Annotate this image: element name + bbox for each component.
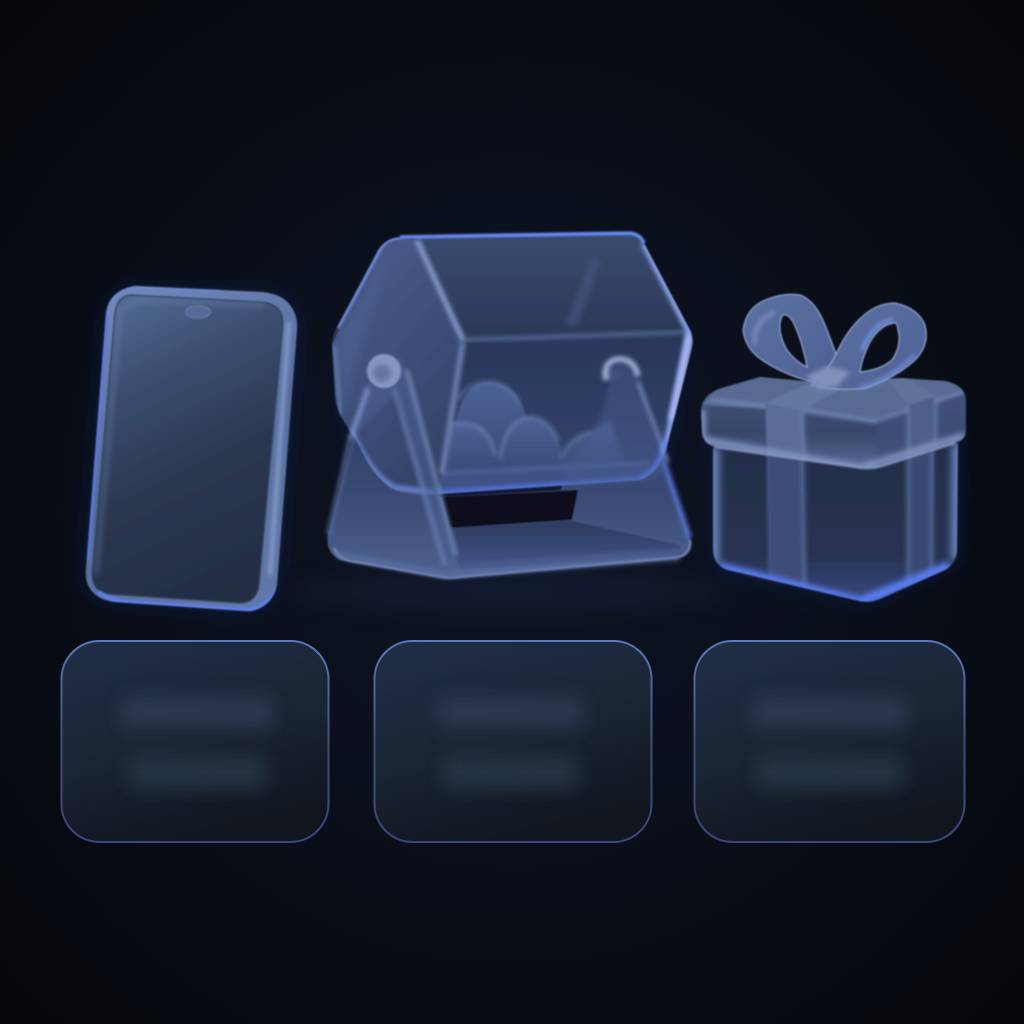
blurred text lines [438, 696, 582, 788]
blurred text lines [122, 696, 272, 788]
stand [328, 380, 690, 578]
icon: smartphone [86, 286, 297, 611]
icon: lottery drum machine [328, 233, 693, 578]
lid top face [700, 375, 968, 422]
panel: card right [694, 641, 964, 842]
left stand arm [330, 358, 456, 578]
lid [701, 377, 966, 468]
lid right face [878, 396, 964, 458]
drum lower lip [440, 464, 648, 490]
right axle [605, 359, 638, 382]
drum body [332, 233, 693, 495]
drum left face [332, 237, 463, 497]
box body [713, 443, 958, 602]
bow right loop [812, 303, 926, 389]
right stand arm [560, 362, 667, 485]
phone speaker notch [186, 306, 210, 318]
panel: card middle [374, 641, 652, 842]
drum upper panel [418, 234, 672, 314]
drum balls [448, 382, 625, 472]
drum reflection [565, 258, 600, 325]
bow [743, 294, 926, 390]
drum lower panel [444, 350, 680, 473]
panel: card left [62, 641, 328, 842]
bow knot [806, 366, 850, 390]
blurred text lines [752, 696, 906, 788]
drum mid line [462, 332, 690, 340]
box ribbons [766, 455, 805, 582]
lid ribbon [764, 404, 804, 454]
drum rim glow [644, 243, 690, 450]
glow under icons [290, 572, 730, 612]
bow left loop [743, 294, 838, 383]
left axle [367, 354, 401, 388]
icon: gift box [700, 294, 968, 602]
